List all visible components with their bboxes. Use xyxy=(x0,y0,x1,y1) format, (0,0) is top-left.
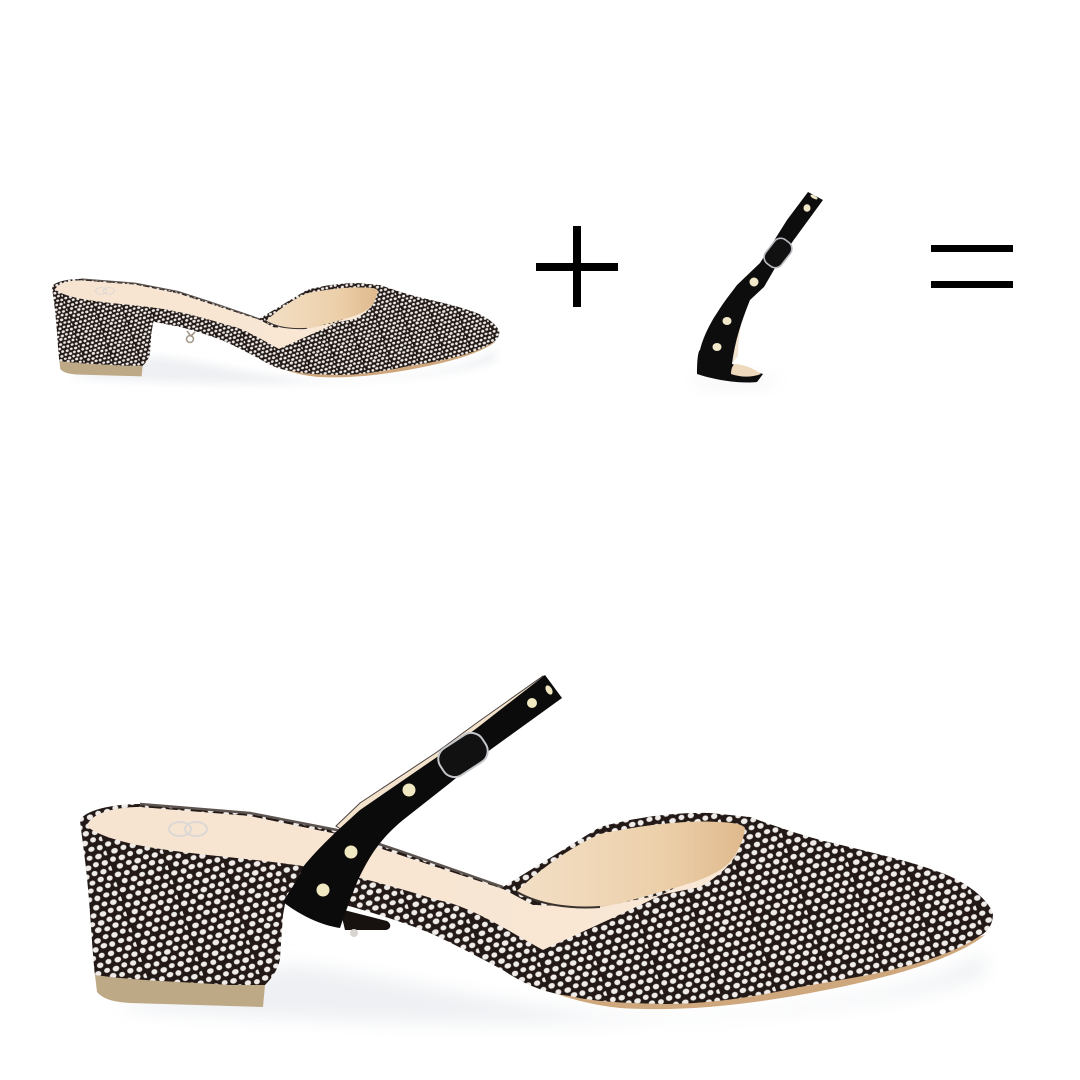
strap xyxy=(283,675,562,928)
studs xyxy=(316,684,554,896)
pull charm xyxy=(350,929,358,937)
plus sign xyxy=(536,226,618,307)
small strap accessory xyxy=(690,192,823,386)
cream footpad xyxy=(731,364,761,377)
cream lining xyxy=(733,297,750,362)
strap body xyxy=(697,192,823,383)
equals sign xyxy=(931,245,1013,288)
large mule shoe with strap xyxy=(80,675,993,1023)
icon: buckle xyxy=(433,728,493,782)
heel tab under strap xyxy=(340,909,390,930)
icon: buckle xyxy=(761,235,795,271)
studs xyxy=(712,194,818,351)
icon: pull charm xyxy=(186,331,195,342)
footpad shadow xyxy=(690,376,780,386)
strap underside xyxy=(336,676,546,832)
small mule shoe xyxy=(52,279,499,384)
